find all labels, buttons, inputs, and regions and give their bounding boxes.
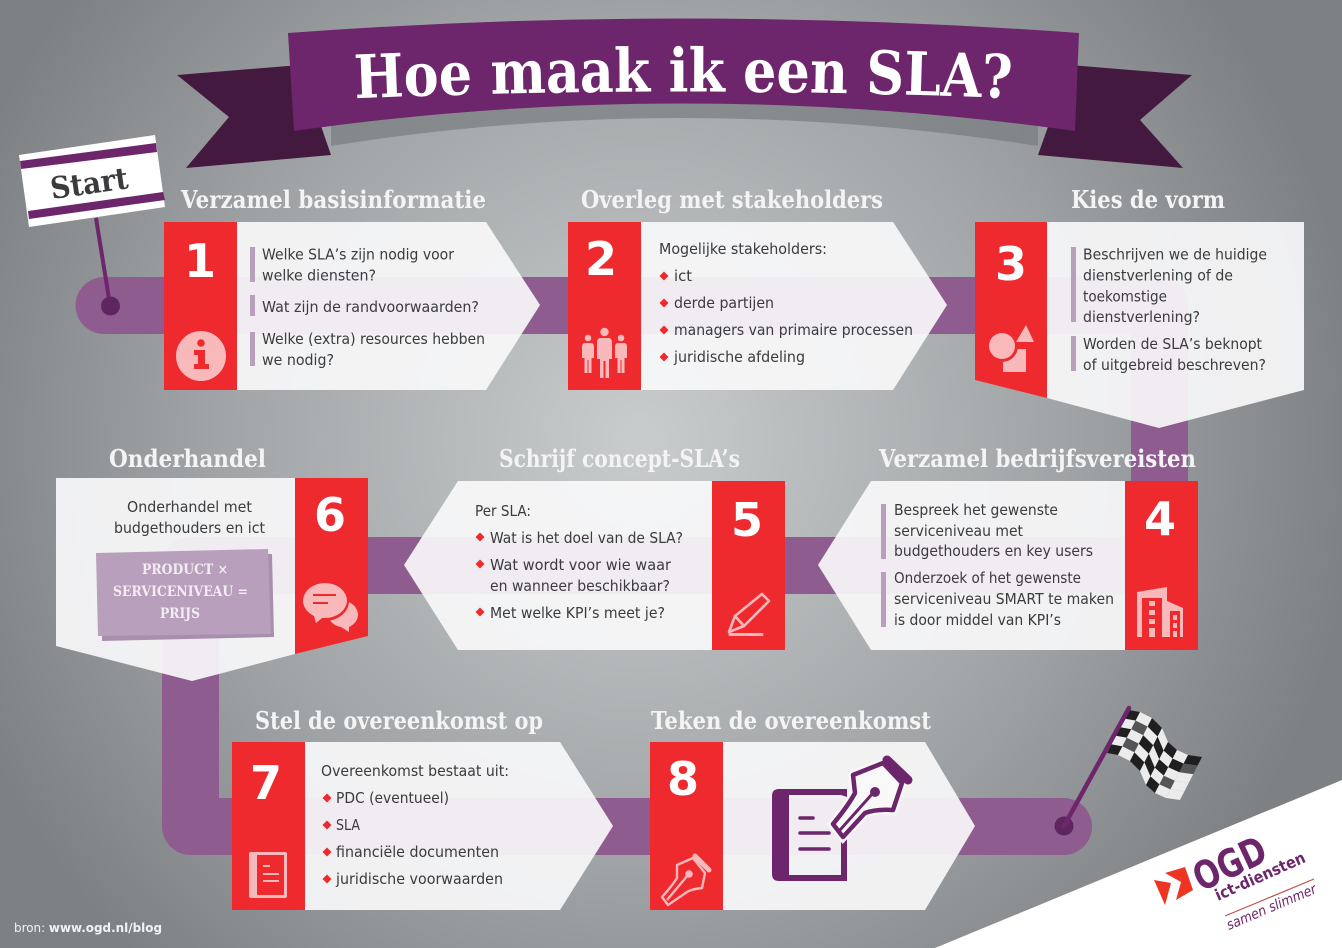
step 4 text: Onderzoek of het gewenste	[894, 569, 1081, 587]
step 1 text: Wat zijn de randvoorwaarden?	[262, 298, 479, 316]
document outline	[772, 789, 847, 881]
panel: step 5	[404, 481, 785, 650]
step 3 text: of uitgebreid beschreven?	[1083, 356, 1266, 374]
step 3 bullet bars	[1071, 247, 1076, 371]
logo wordmark: OGD	[1186, 828, 1274, 901]
step 7 bullet list: SLA	[336, 816, 361, 834]
sign pole	[96, 218, 110, 305]
title banner	[177, 18, 1192, 168]
step 7 number: 7	[250, 756, 282, 810]
heading: step 8: Teken de overeenkomst	[651, 706, 931, 735]
finish flag	[1054, 708, 1202, 836]
nib background	[833, 763, 902, 837]
step 4 text: Bespreek het gewenste	[894, 501, 1058, 519]
step 1 text: Welke SLA’s zijn nodig voor	[262, 246, 455, 264]
panel: step 2	[568, 222, 947, 390]
step 7 bullet list: juridische voorwaarden	[335, 870, 503, 888]
step 6 text	[114, 498, 265, 537]
step 2 bullet list: managers van primaire processen	[674, 321, 913, 339]
step 5 red tab	[712, 481, 785, 650]
step 1 number: 1	[184, 234, 216, 288]
step 3 text: toekomstige	[1083, 288, 1167, 306]
heading: step 3: Kies de vorm	[1071, 185, 1225, 214]
step 6 red tab	[295, 478, 368, 654]
heading: step 1: Verzamel basisinformatie	[180, 185, 486, 214]
step 7 body	[305, 742, 613, 910]
sign bottom stripe	[28, 192, 165, 219]
step 6 text: budgethouders en ict	[114, 519, 265, 537]
step 3 text: dienstverlening?	[1083, 308, 1200, 326]
source credit: bron: www.ogd.nl/blog	[14, 920, 162, 935]
step 2 number: 2	[585, 232, 617, 286]
step 7 bullet list	[322, 789, 503, 888]
logo tagline: samen slimmer	[1224, 881, 1320, 934]
icon: chat bubbles	[301, 581, 358, 632]
step 1 text: Welke (extra) resources hebben	[262, 330, 485, 348]
heading: step 4: Verzamel bedrijfsvereisten	[878, 444, 1196, 473]
panel: step 4	[818, 481, 1198, 650]
step 5 bullet list: en wanneer beschikbaar?	[490, 577, 670, 595]
logo: OGD	[1154, 828, 1320, 934]
formula card: PRIJS	[160, 606, 200, 622]
step 4 text: serviceniveau met	[894, 522, 1023, 540]
step 4 red tab	[1125, 481, 1198, 650]
icon: pencil	[729, 594, 769, 634]
icon: shapes	[986, 325, 1034, 372]
pole base dot	[101, 296, 120, 316]
sign label: Start	[48, 161, 130, 207]
logo rule	[1225, 879, 1314, 916]
panel: step 3	[975, 222, 1304, 428]
banner shadow	[331, 100, 1038, 146]
step 4 body	[818, 481, 1125, 650]
step 3 body	[1047, 222, 1304, 428]
step 3 text	[1083, 246, 1267, 374]
finish base dot	[1054, 816, 1074, 836]
step 2 text: Mogelijke stakeholders:	[659, 240, 827, 258]
step 2 bullet list: ict	[674, 267, 692, 285]
icon: info	[176, 331, 226, 381]
step 5 bullet list	[476, 529, 683, 622]
step 8 red tab	[650, 742, 723, 910]
banner left tail	[177, 65, 331, 168]
illustration: document and fountain pen	[772, 760, 908, 881]
step 1 body	[237, 222, 540, 390]
step 6 number: 6	[314, 488, 346, 542]
step 4 text	[894, 501, 1114, 629]
step 1 text	[262, 246, 485, 369]
step 6 body	[56, 478, 295, 681]
nib hole	[870, 787, 880, 797]
heading: step 7: Stel de overeenkomst op	[255, 706, 543, 735]
panel: step 8	[650, 742, 975, 910]
step 5 text: Per SLA:	[475, 502, 531, 520]
step 5 number: 5	[731, 493, 763, 547]
step 4 text: budgethouders en key users	[894, 542, 1093, 560]
step 2 bullet list: juridische afdeling	[673, 348, 805, 366]
step 3 text: Worden de SLA’s beknopt	[1083, 335, 1262, 353]
winding purple route	[104, 306, 1160, 826]
start sign	[19, 135, 165, 316]
step 3 text: dienstverlening of de	[1083, 266, 1233, 284]
step 1 text: we nodig?	[262, 351, 334, 369]
flag pole	[1064, 708, 1129, 826]
panel: step 6	[56, 478, 368, 681]
step 4 bullet bars	[881, 504, 886, 627]
step 2 body	[641, 222, 947, 390]
step 1 bullet bars	[250, 247, 255, 366]
nib slit	[840, 793, 873, 830]
checkered flag	[1107, 710, 1202, 800]
step 1 red tab	[164, 222, 237, 390]
title: Hoe maak ik een SLA?	[356, 46, 1011, 98]
formula card: SERVICENIVEAU =	[113, 584, 248, 600]
icon: document	[249, 852, 287, 898]
nib outline	[833, 763, 902, 837]
step 3 red tab	[975, 222, 1047, 398]
panel: step 7	[232, 742, 613, 910]
heading: step 6: Onderhandel	[109, 444, 266, 473]
icon: people	[582, 328, 627, 378]
logo mark right	[1165, 867, 1193, 900]
heading: step 5: Schrijf concept-SLA’s	[499, 444, 740, 473]
step 2 bullet list	[660, 267, 913, 366]
step 8 number: 8	[667, 752, 699, 806]
icon: small pen nib	[662, 856, 709, 905]
footer white corner	[935, 780, 1342, 948]
step 7 red tab	[232, 742, 305, 910]
heading: step 2: Overleg met stakeholders	[581, 185, 883, 214]
step 5 bullet list: Wat is het doel van de SLA?	[490, 529, 683, 547]
step 3 text: Beschrijven we de huidige	[1083, 246, 1267, 264]
icon: buildings	[1137, 587, 1183, 637]
step 1 text: welke diensten?	[262, 266, 376, 284]
step 7 bullet list: financiële documenten	[336, 843, 499, 861]
step 2 bullet list: derde partijen	[674, 294, 774, 312]
step 7 bullet list: PDC (eventueel)	[336, 789, 449, 807]
step 4 number: 4	[1144, 492, 1176, 546]
document lines	[800, 818, 829, 849]
step 4 text: serviceniveau SMART te maken	[894, 590, 1114, 608]
step 8 body	[723, 742, 975, 910]
logo mark left	[1154, 880, 1171, 905]
banner right tail	[1038, 65, 1192, 168]
step 3 number: 3	[995, 237, 1027, 291]
panel: step 1	[164, 222, 540, 390]
logo subline: ict-diensten	[1212, 848, 1308, 905]
sign board	[19, 135, 165, 227]
nib cap	[887, 760, 908, 780]
step 7 text: Overeenkomst bestaat uit:	[321, 762, 509, 780]
step 4 text: is door middel van KPI’s	[894, 611, 1061, 629]
step 6 text: Onderhandel met	[127, 498, 252, 516]
formula card	[96, 549, 274, 641]
formula card: PRODUCT ×	[142, 562, 228, 578]
step 5 bullet list: Met welke KPI’s meet je?	[490, 604, 665, 622]
sign top stripe	[20, 143, 157, 169]
step 2 red tab	[568, 222, 641, 390]
step 5 body	[404, 481, 712, 650]
step 5 bullet list: Wat wordt voor wie waar	[490, 556, 672, 574]
banner main ribbon	[288, 18, 1079, 131]
